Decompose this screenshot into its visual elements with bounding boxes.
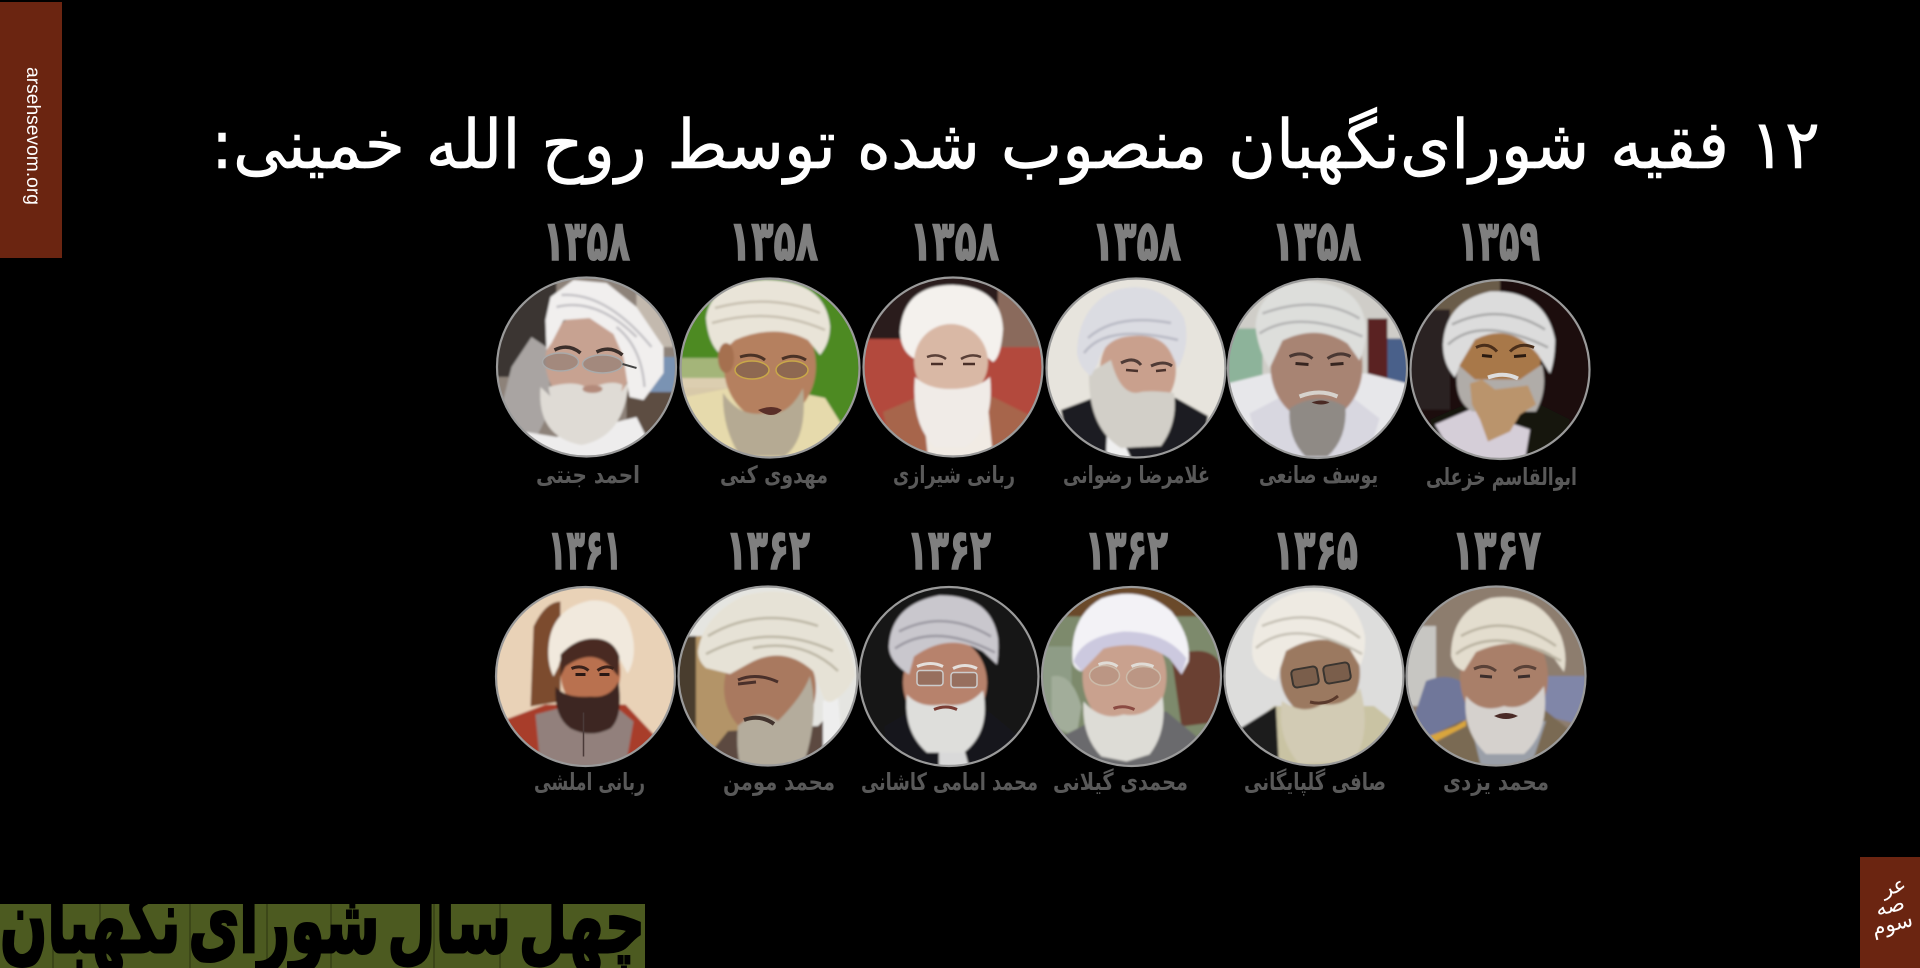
card: Mohammad Yazdi xyxy=(1406,518,1586,796)
year: ۱۳۶۷ xyxy=(1452,518,1541,583)
year: ۱۳۶۲ xyxy=(726,518,810,583)
portrait: Mohammad Yazdi xyxy=(1406,586,1586,766)
name: غلامرضا رضوانی xyxy=(1063,461,1210,489)
card: Khazali xyxy=(1410,209,1590,491)
year: ۱۳۵۸ xyxy=(543,209,630,274)
name: صافی گلپایگانی xyxy=(1244,768,1386,796)
portrait: Abolghasem Khazali xyxy=(1410,280,1590,460)
portrait: Mohammad Emami Kashani xyxy=(859,586,1039,766)
portrait: Safi Golpayegani xyxy=(1224,586,1404,766)
year: ۱۳۵۸ xyxy=(1272,209,1361,274)
year: ۱۳۶۵ xyxy=(1273,518,1358,583)
card: Mahdavi Kani xyxy=(680,209,860,489)
year: ۱۳۵۸ xyxy=(729,209,818,274)
card: Saneei xyxy=(1228,209,1408,489)
portrait: Mahdavi Kani xyxy=(680,278,860,458)
logo tab: صه xyxy=(1873,891,1907,921)
name: ابوالقاسم خزعلی xyxy=(1426,463,1577,491)
side tab: arsehsevom.org xyxy=(0,2,62,258)
logo tab: عر xyxy=(1878,872,1908,901)
year: ۱۳۶۲ xyxy=(1085,518,1168,583)
portrait: Yousef Saneei xyxy=(1228,278,1408,458)
card: Rabbani Shirazi xyxy=(863,209,1043,489)
card: Rezvani xyxy=(1046,209,1226,489)
portrait: Rabbani Shirazi xyxy=(863,277,1043,457)
portrait: Rabbani Amlashi xyxy=(496,586,676,766)
portrait: Ahmad Jannati xyxy=(496,277,676,457)
name: محمد یزدی xyxy=(1443,768,1549,796)
card: Safi Golpayegani xyxy=(1224,518,1404,796)
card: Ahmad Jannati xyxy=(496,209,676,489)
portrait: Mohammad Momen xyxy=(678,586,858,766)
name: ربانی املشی xyxy=(534,768,645,796)
title: ۱۲ فقیه شورای‌نگهبان منصوب شده توسط روح الله خمینی: xyxy=(211,106,1820,185)
name: مهدوی کنی xyxy=(720,461,828,489)
logo tab xyxy=(1860,857,1920,968)
year: ۱۳۶۱ xyxy=(548,518,622,583)
name: محمد مومن xyxy=(723,768,835,796)
year: ۱۳۵۹ xyxy=(1458,209,1540,274)
side tab: arsehsevom.org: arsehsevom.org xyxy=(22,67,43,205)
name: ربانی شیرازی xyxy=(893,461,1015,489)
name: یوسف صانعی xyxy=(1259,461,1378,489)
name: محمد امامی کاشانی xyxy=(861,768,1038,796)
portrait: Gholamreza Rezvani xyxy=(1046,278,1226,458)
card: Mohammadi Gilani xyxy=(1042,518,1222,796)
name: محمدی گیلانی xyxy=(1053,768,1188,796)
card: Rabbani Amlashi xyxy=(496,518,676,796)
portrait: Mohammadi Gilani xyxy=(1042,586,1222,766)
logo tab: سوم xyxy=(1869,907,1915,940)
name: احمد جنتی xyxy=(536,461,640,489)
card: Emami Kashani xyxy=(859,518,1039,796)
footer banner: forty years of the Guardian Council xyxy=(0,904,645,968)
card: Mohammad Momen xyxy=(678,518,858,796)
year: ۱۳۶۲ xyxy=(907,518,991,583)
year: ۱۳۵۸ xyxy=(1092,209,1181,274)
year: ۱۳۵۸ xyxy=(910,209,999,274)
